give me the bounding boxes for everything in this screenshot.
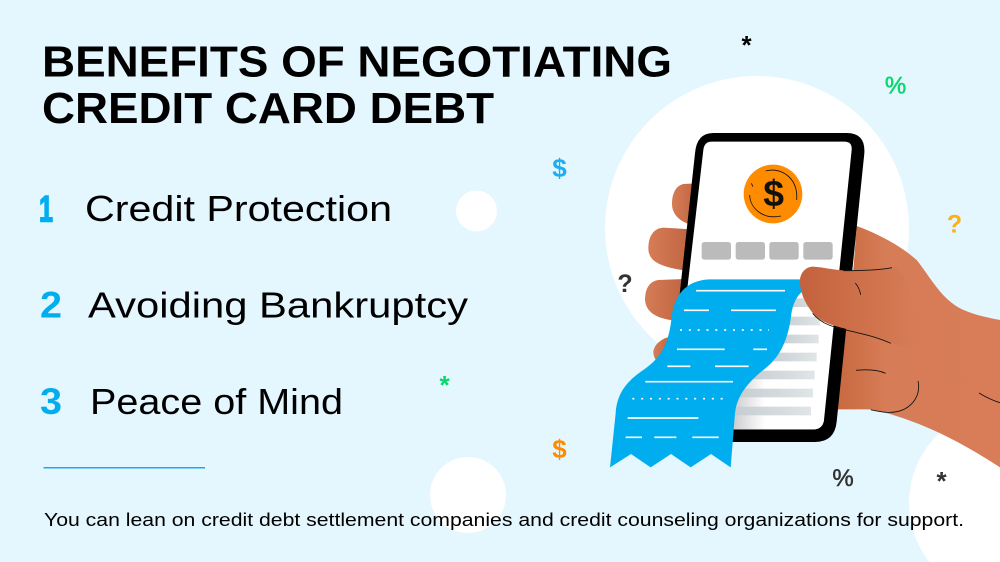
- receipt lines: [626, 291, 785, 437]
- symbol: orange question: ?: [947, 210, 962, 238]
- benefit 3: peace of mind: Peace of Mind: [90, 381, 343, 422]
- benefit 2: avoiding bankruptcy: Avoiding Bankruptcy: [88, 284, 468, 326]
- floating symbols: [439, 30, 962, 496]
- decorative white circles: [430, 76, 1000, 562]
- phone screen: [687, 142, 852, 429]
- title: BENEFITS OF NEGOTIATING: [42, 38, 672, 86]
- symbol: green percent: %: [885, 72, 906, 100]
- benefit 2: avoiding bankruptcy: 2: [40, 284, 62, 326]
- symbol: black asterisk: *: [741, 30, 752, 60]
- footer note: You can lean on credit debt settlement companies and credit counseling organizations for support.: [44, 510, 964, 530]
- symbol: blue dollar: $: [552, 153, 567, 183]
- title: [42, 38, 672, 133]
- fingers behind phone: [645, 183, 697, 363]
- symbol: dark asterisk: *: [936, 466, 947, 496]
- benefit 1: credit protection: Credit Protection: [85, 188, 392, 229]
- receipt text rows on screen: [733, 298, 821, 415]
- divider rule: [44, 467, 205, 468]
- coin icon: [744, 165, 802, 223]
- benefit 3: peace of mind: 3: [40, 381, 62, 422]
- hand crease lines: [813, 268, 1000, 412]
- benefit 1: credit protection: 1: [39, 188, 53, 230]
- phone body: [678, 133, 864, 442]
- illustration: hand holding phone with receipt: [610, 133, 1000, 467]
- symbol: dark question: ?: [617, 270, 633, 298]
- title: CREDIT CARD DEBT: [42, 84, 494, 133]
- coin icon: $: [763, 172, 784, 214]
- symbol: orange dollar: $: [552, 434, 567, 464]
- thumb: [800, 267, 917, 351]
- back of hand and wrist: [837, 226, 1000, 467]
- symbol: dark percent: %: [832, 465, 854, 492]
- blue receipt: [610, 279, 802, 467]
- symbol: green asterisk: *: [439, 370, 450, 400]
- keypad squares: [702, 242, 833, 260]
